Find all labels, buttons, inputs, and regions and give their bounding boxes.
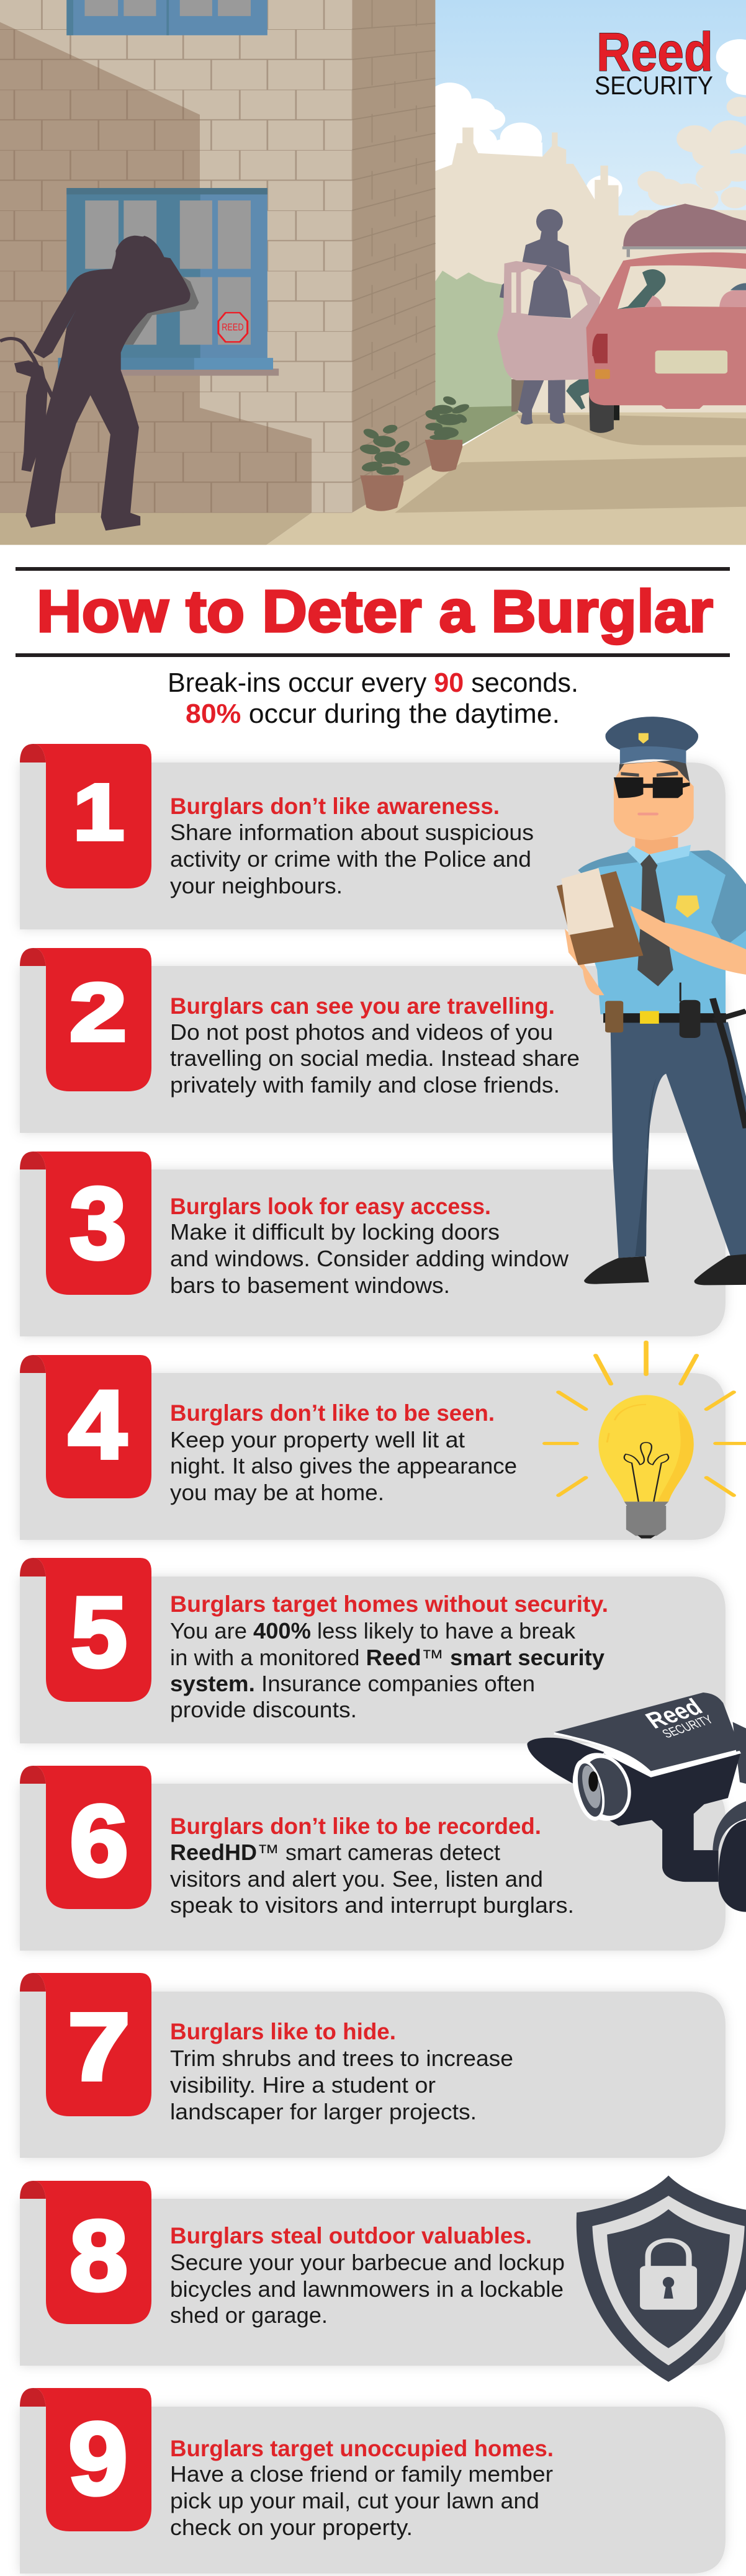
main window <box>58 188 279 376</box>
driveway <box>266 413 746 545</box>
sky <box>435 0 746 285</box>
open car door <box>497 261 600 380</box>
step 6: visitors and alert you. See, listen and <box>170 1866 543 1892</box>
title block <box>16 567 730 657</box>
step 9: 9 <box>68 2402 128 2516</box>
step 5: in with a monitored Reed™ smart security <box>170 1645 604 1670</box>
intro statistics: 80% occur during the daytime. <box>186 699 560 729</box>
visor underside <box>527 1738 604 1784</box>
shoes <box>584 1254 746 1285</box>
neck and collar <box>635 837 678 862</box>
step 3: Make it difficult by locking doors <box>170 1219 500 1245</box>
roof luggage <box>622 203 746 257</box>
step 3: bars to basement windows. <box>170 1272 450 1298</box>
hedge <box>435 271 511 408</box>
filament <box>624 1442 668 1501</box>
trousers <box>611 1022 746 1258</box>
window sticker <box>218 313 248 342</box>
step 3: Burglars look for easy access. <box>170 1194 491 1219</box>
step 1 <box>20 744 726 929</box>
bulb base <box>624 1501 668 1536</box>
step 4: night. It also gives the appearance <box>170 1453 517 1478</box>
radio <box>680 983 700 1038</box>
step 5: system. Insurance companies often <box>170 1671 535 1696</box>
step 5: Burglars target homes without security. <box>170 1591 608 1617</box>
step 7: 7 <box>68 1993 130 2100</box>
step 9: pick up your mail, cut your lawn and <box>170 2488 539 2513</box>
step 4: you may be at home. <box>170 1480 384 1505</box>
burglar shadow on glass <box>114 260 199 345</box>
clipboard <box>557 871 643 965</box>
step 8: Secure your your barbecue and lockup <box>170 2250 565 2275</box>
camera body <box>576 1754 740 1882</box>
grass <box>435 406 519 459</box>
logo: Reed <box>596 21 713 83</box>
step 2: 2 <box>70 967 127 1058</box>
step 8: bicycles and lawnmowers in a lockable <box>170 2276 564 2302</box>
step 5: 5 <box>71 1576 127 1688</box>
icon: shield with padlock <box>577 2175 746 2382</box>
building front wall <box>0 0 352 513</box>
hood top <box>554 1693 740 1771</box>
window sticker: REED <box>222 321 243 333</box>
hero illustration: burglar at window and family leaving by car <box>0 0 746 545</box>
step 8: 8 <box>70 2200 128 2312</box>
step 6: 6 <box>70 1784 128 1897</box>
step 7 <box>20 1973 726 2158</box>
belt <box>603 1013 726 1022</box>
bulb glass <box>598 1395 694 1501</box>
wall cast shadow <box>0 22 312 513</box>
camera branding <box>640 1693 716 1742</box>
step 1: 1 <box>73 768 124 857</box>
burglar silhouette <box>0 236 191 530</box>
holster <box>605 1001 623 1032</box>
mount <box>719 1820 746 1912</box>
step 8 <box>20 2181 726 2366</box>
plant pot near <box>359 423 413 511</box>
step 2 <box>20 948 726 1133</box>
step 6 <box>20 1766 726 1951</box>
step 3: 3 <box>70 1166 127 1280</box>
hood white edge <box>554 1733 740 1774</box>
step 8: shed or garage. <box>170 2302 328 2328</box>
eyebrows <box>621 771 678 777</box>
step 1: activity or crime with the Police and <box>170 846 531 872</box>
paper <box>562 868 614 935</box>
step 2: privately with family and close friends. <box>170 1072 560 1098</box>
step 2: travelling on social media. Instead share <box>170 1045 580 1071</box>
step 1: your neighbours. <box>170 873 343 898</box>
rays <box>545 1342 746 1495</box>
upper window <box>66 0 267 35</box>
shirt <box>571 851 746 1014</box>
sleeves <box>578 850 746 946</box>
icon: light bulb <box>545 1342 746 1539</box>
title block: How to Deter a Burglar <box>37 578 713 645</box>
step 9 <box>20 2388 726 2574</box>
baton <box>712 998 746 1128</box>
face <box>614 762 694 840</box>
intro statistics <box>168 668 578 729</box>
step 5: provide discounts. <box>170 1697 357 1722</box>
step 7: landscaper for larger projects. <box>170 2099 477 2124</box>
car tyres <box>589 395 614 433</box>
step 4: 4 <box>68 1371 127 1479</box>
step 6: ReedHD™ smart cameras detect <box>170 1840 500 1865</box>
sunglasses <box>614 777 690 798</box>
step 4: Keep your property well lit at <box>170 1427 465 1452</box>
step 7: visibility. Hire a student or <box>170 2072 436 2098</box>
step 7: Trim shrubs and trees to increase <box>170 2046 513 2071</box>
step 8: Burglars steal outdoor valuables. <box>170 2223 532 2248</box>
background houses <box>435 127 746 417</box>
icon: security camera <box>527 1693 746 1912</box>
hair <box>619 759 690 783</box>
step 9: check on your property. <box>170 2515 413 2540</box>
background trees <box>637 97 746 210</box>
forearm right <box>631 906 746 975</box>
step 2: Do not post photos and videos of you <box>170 1019 553 1045</box>
logo <box>595 21 713 100</box>
chest badge <box>676 895 699 918</box>
passenger leg <box>566 374 590 409</box>
building side wall <box>352 0 435 513</box>
plant pot far <box>423 395 471 472</box>
intro statistics: Break-ins occur every 90 seconds. <box>168 668 578 698</box>
icon: police officer <box>557 717 746 1285</box>
step 5 <box>20 1558 726 1743</box>
logo: SECURITY <box>595 71 713 100</box>
camera branding: Reed <box>640 1694 708 1733</box>
child behind door <box>511 292 529 412</box>
step 3 <box>20 1152 726 1336</box>
step 1: Share information about suspicious <box>170 820 534 845</box>
woman at car door <box>500 209 586 424</box>
step 2: Burglars can see you are travelling. <box>170 993 555 1019</box>
step 4: Burglars don’t like to be seen. <box>170 1400 495 1426</box>
step 6: speak to visitors and interrupt burglars. <box>170 1892 574 1918</box>
mouth <box>637 813 658 815</box>
hat <box>605 717 698 751</box>
step 1: Burglars don’t like awareness. <box>170 794 500 819</box>
step 9: Burglars target unoccupied homes. <box>170 2436 554 2461</box>
lens housing <box>567 1750 637 1823</box>
step 9: Have a close friend or family member <box>170 2461 553 2487</box>
step 5: You are 400% less likely to have a break <box>170 1618 576 1644</box>
rear arm <box>733 1722 746 1784</box>
step 7: Burglars like to hide. <box>170 2019 396 2044</box>
tie <box>637 854 673 986</box>
driveway shadows <box>395 457 746 513</box>
car body <box>586 253 746 409</box>
step 4 <box>20 1355 726 1540</box>
clouds <box>400 39 746 202</box>
step 3: and windows. Consider adding window <box>170 1246 569 1271</box>
step 6: Burglars don’t like to be recorded. <box>170 1813 541 1839</box>
padlock <box>640 2240 697 2310</box>
lower arm left <box>565 929 604 995</box>
